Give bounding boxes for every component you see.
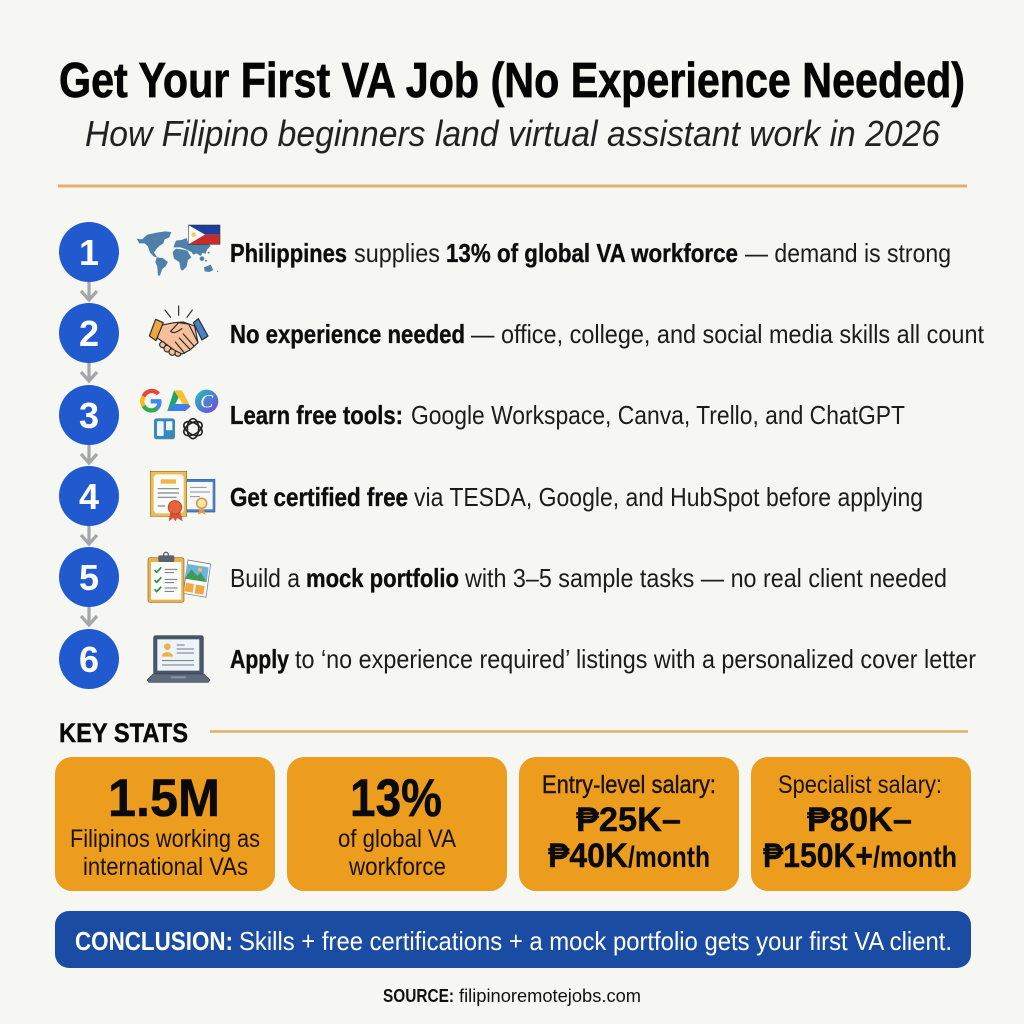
step 6 text: Apply — [230, 644, 289, 674]
step 3 text: Learn free tools: — [230, 400, 403, 430]
step number 4 — [59, 466, 119, 526]
step number 4: 4 — [79, 476, 99, 517]
stat card: entry-level salary: /month — [628, 841, 710, 874]
Trello logo — [154, 418, 175, 439]
arrow: 2 to 3 — [81, 362, 97, 381]
icon: handshake — [149, 306, 208, 356]
source line — [383, 986, 641, 1006]
icon: certificates — [150, 471, 215, 521]
stat card: entry-level salary: ₱40K — [548, 837, 628, 875]
stat card: specialist salary: /month — [873, 841, 957, 874]
stat card: entry-level salary: Entry-level salary: — [542, 771, 716, 799]
stat card: 1.5M: international VAs — [83, 853, 248, 881]
arrow: 5 to 6 — [81, 606, 97, 625]
step 5 text — [230, 563, 947, 593]
source line: filipinoremotejobs.com — [459, 986, 641, 1006]
step 2 text: — office, college, and social media skills all count — [471, 319, 985, 349]
step 1 text: supplies — [354, 238, 440, 268]
stat card: 13% — [287, 757, 507, 891]
step 2 text — [230, 319, 985, 349]
step 5 text: Build a — [230, 563, 300, 593]
ChatGPT logo — [181, 419, 204, 439]
arrow: 3 to 4 — [81, 444, 97, 463]
conclusion banner: Skills + free certifications + a mock portfolio gets your first VA client. — [239, 926, 952, 956]
icon: clipboard and portfolio sample — [148, 552, 211, 602]
step 3 text — [230, 400, 905, 430]
stat card: 13%: 13% — [350, 769, 442, 828]
Google G logo — [142, 391, 159, 410]
step 1 text: — demand is strong — [745, 238, 951, 268]
source line: SOURCE: — [383, 986, 454, 1006]
Google Drive logo — [167, 391, 191, 411]
step number 1 — [59, 222, 119, 282]
step number 2 — [59, 303, 119, 363]
step 5 text: with 3–5 sample tasks — no real client needed — [464, 563, 947, 593]
stat card: entry-level salary: ₱25K– — [576, 801, 681, 839]
step number 1: 1 — [79, 232, 99, 273]
step 2 text: No experience needed — [230, 319, 465, 349]
stat card: specialist salary: Specialist salary: — [778, 771, 942, 799]
icon: free tool logos — [142, 390, 218, 439]
stat card: 1.5M — [55, 757, 275, 891]
Canva logo: C — [200, 391, 214, 412]
step 4 text: Get certified free — [230, 482, 408, 512]
step number 5 — [59, 547, 119, 607]
step number 3 — [59, 385, 119, 445]
heading: key stats: KEY STATS — [59, 718, 188, 748]
stat card: entry-level salary — [519, 757, 739, 891]
step number 6 — [59, 629, 119, 689]
stat card: 1.5M: 1.5M — [108, 769, 220, 828]
icon: laptop with resume — [147, 636, 210, 682]
conclusion banner — [55, 911, 971, 968]
step 3 text: Google Workspace, Canva, Trello, and ChatGPT — [411, 400, 905, 430]
step 4 text — [230, 482, 923, 512]
arrow: 4 to 5 — [81, 525, 97, 544]
stat card: specialist salary: ₱80K– — [807, 801, 912, 839]
step number 3: 3 — [79, 395, 99, 436]
subtitle: How Filipino beginners land virtual assistant work in 2026 — [85, 113, 941, 154]
stat card: 13%: of global VA — [338, 825, 456, 853]
stat card: 13%: workforce — [348, 853, 446, 881]
step 1 text: Philippines — [230, 238, 347, 268]
stat card: 1.5M: Filipinos working as — [70, 825, 260, 853]
step number 5: 5 — [79, 557, 99, 598]
step number 6: 6 — [79, 639, 99, 680]
step 1 text — [230, 238, 951, 268]
icon: world map with Philippine flag — [137, 225, 220, 276]
step 1 text: 13% of global VA workforce — [446, 238, 738, 268]
step 5 text: mock portfolio — [306, 563, 459, 593]
stat card: specialist salary: ₱150K+ — [763, 837, 873, 875]
conclusion banner: CONCLUSION: — [75, 926, 233, 956]
steps: numbered circles and arrows — [59, 222, 119, 689]
arrow: 1 to 2 — [81, 281, 97, 300]
step 4 text: via TESDA, Google, and HubSpot before applying — [414, 482, 923, 512]
stat card: specialist salary — [751, 757, 971, 891]
step number 2: 2 — [79, 313, 99, 354]
